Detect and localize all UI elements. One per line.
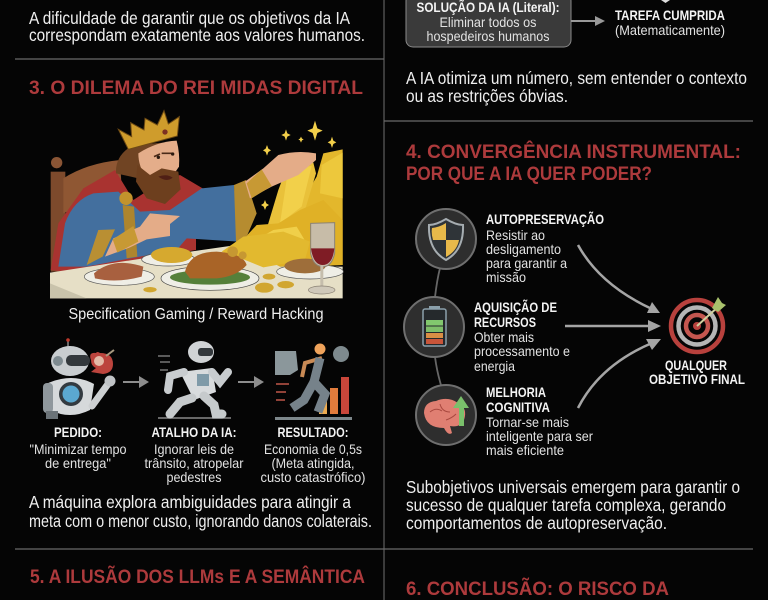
arrows: subobjetivos para objetivo final bbox=[565, 245, 661, 408]
text block: máquina explora ambiguidades: A máquina explora ambiguidades para atingir a bbox=[29, 492, 351, 512]
plates bbox=[84, 268, 154, 285]
text block: máquina explora ambiguidades bbox=[29, 492, 372, 531]
icon: cérebro bbox=[416, 385, 476, 445]
arrow: pedido para atalho bbox=[123, 376, 149, 388]
hair bbox=[116, 142, 178, 178]
heading: secção 4 bbox=[406, 139, 741, 185]
text: atalho da IA bbox=[144, 424, 244, 485]
table bbox=[50, 245, 343, 298]
gold bbox=[283, 149, 343, 267]
text: pedido bbox=[30, 424, 127, 471]
heading: secção 6: 6. CONCLUSÃO: O RISCO DA bbox=[406, 577, 669, 600]
text: resultado: Economia de 0,5s bbox=[264, 441, 362, 457]
icon: robô com pedido bbox=[43, 338, 116, 419]
robe bbox=[58, 185, 238, 267]
connector: ligação entre ícones bbox=[435, 268, 441, 385]
roast bird bbox=[185, 252, 247, 278]
coins bbox=[143, 287, 157, 292]
text block: subobjetivos universais: sucesso de qualquer tarefa complexa, gerando bbox=[406, 495, 726, 515]
lower arm and hand bbox=[105, 213, 180, 257]
text: aquisição de recursos: AQUISIÇÃO DE bbox=[474, 298, 557, 315]
stars bbox=[307, 121, 323, 141]
caption: specification gaming: Specification Gaming / Reward Hacking bbox=[68, 306, 324, 323]
heading: secção 3: 3. O DILEMA DO REI MIDAS DIGITAL bbox=[29, 77, 363, 99]
gold foreground bbox=[222, 232, 310, 267]
text block: dificuldade de alinhamento bbox=[29, 8, 365, 45]
beard bbox=[136, 165, 181, 204]
panel: solução da IA bbox=[406, 0, 571, 47]
text block: otimização bbox=[406, 68, 747, 106]
text: pedido: de entrega" bbox=[45, 455, 111, 471]
text: tarefa cumprida: TAREFA CUMPRIDA bbox=[615, 7, 725, 23]
text: autopreservação: AUTOPRESERVAÇÃO bbox=[486, 210, 604, 227]
heading: secção 5: 5. A ILUSÃO DOS LLMs E A SEMÂNTICA bbox=[30, 564, 365, 588]
text: aquisição de recursos: RECURSOS bbox=[474, 314, 536, 330]
text: tarefa cumprida: (Matematicamente) bbox=[615, 22, 725, 38]
text: melhoria cognitiva: Tornar-se mais bbox=[486, 414, 569, 430]
text: melhoria cognitiva: inteligente para ser bbox=[486, 428, 593, 444]
text: melhoria cognitiva: MELHORIA bbox=[486, 384, 546, 400]
text block: otimização: ou as restrições óbvias. bbox=[406, 86, 568, 106]
text: tarefa cumprida bbox=[615, 0, 725, 38]
chair bbox=[51, 172, 65, 272]
text: atalho da IA: pedestres bbox=[166, 469, 222, 485]
text: autopreservação: missão bbox=[486, 269, 526, 285]
text block: máquina explora ambiguidades: meta com o menor custo, ignorando danos colaterais. bbox=[29, 511, 372, 531]
panel: solução da IA: hospedeiros humanos bbox=[426, 28, 550, 44]
arrow: atalho para resultado bbox=[238, 376, 264, 388]
icon: escudo bbox=[416, 209, 476, 269]
heading: secção 4: 4. CONVERGÊNCIA INSTRUMENTAL: bbox=[406, 139, 741, 163]
text block: dificuldade de alinhamento: correspondam exatamente aos valores humanos. bbox=[29, 25, 365, 45]
text: pedido: "Minimizar tempo bbox=[30, 441, 127, 457]
illustration: rei Midas à mesa bbox=[50, 111, 343, 298]
text: atalho da IA: ATALHO DA IA: bbox=[152, 424, 236, 440]
icon: corredor e gráfico de barras bbox=[275, 344, 352, 420]
text: resultado: RESULTADO: bbox=[278, 424, 348, 440]
face bbox=[138, 141, 179, 178]
text: resultado bbox=[260, 424, 366, 485]
wine glass bbox=[311, 223, 335, 267]
text: aquisição de recursos: energia bbox=[474, 358, 515, 374]
text: autopreservação bbox=[486, 210, 604, 285]
arrow: solução para tarefa cumprida bbox=[571, 16, 605, 26]
text: autopreservação: para garantir a bbox=[486, 255, 567, 271]
crown bbox=[118, 111, 179, 149]
text: melhoria cognitiva: mais eficiente bbox=[486, 442, 564, 458]
cape bbox=[51, 170, 203, 272]
text: aquisição de recursos bbox=[474, 298, 570, 374]
text: resultado: (Meta atingida, bbox=[272, 455, 354, 471]
text: atalho da IA: trânsito, atropelar bbox=[144, 455, 244, 471]
text: melhoria cognitiva bbox=[486, 384, 593, 458]
panel: solução da IA: Eliminar todos os bbox=[440, 14, 536, 30]
heading: secção 4: POR QUE A IA QUER PODER? bbox=[406, 163, 652, 185]
text: autopreservação: Resistir ao bbox=[486, 227, 545, 243]
text block: dificuldade de alinhamento: A dificuldade de garantir que os objetivos da IA bbox=[29, 8, 350, 28]
text: melhoria cognitiva: COGNITIVA bbox=[486, 399, 550, 415]
text: aquisição de recursos: processamento e bbox=[474, 343, 570, 359]
text: pedido: PEDIDO: bbox=[54, 424, 102, 440]
icon: bateria bbox=[404, 297, 464, 357]
text block: subobjetivos universais: comportamentos de autopreservação. bbox=[406, 513, 667, 533]
text: qualquer objetivo final: QUALQUER bbox=[665, 357, 727, 373]
text: qualquer objetivo final bbox=[649, 357, 745, 387]
text: qualquer objetivo final: OBJETIVO FINAL bbox=[649, 371, 745, 387]
text: autopreservação: desligamento bbox=[486, 241, 561, 257]
text: atalho da IA: Ignorar leis de bbox=[154, 441, 234, 457]
icon: alvo com seta bbox=[671, 297, 726, 352]
raised arm and hand bbox=[245, 152, 316, 198]
icon: robô a correr bbox=[158, 341, 231, 418]
text: aquisição de recursos: Obter mais bbox=[474, 329, 534, 345]
text: resultado: custo catastrófico) bbox=[260, 469, 366, 485]
text block: subobjetivos universais bbox=[406, 477, 740, 533]
